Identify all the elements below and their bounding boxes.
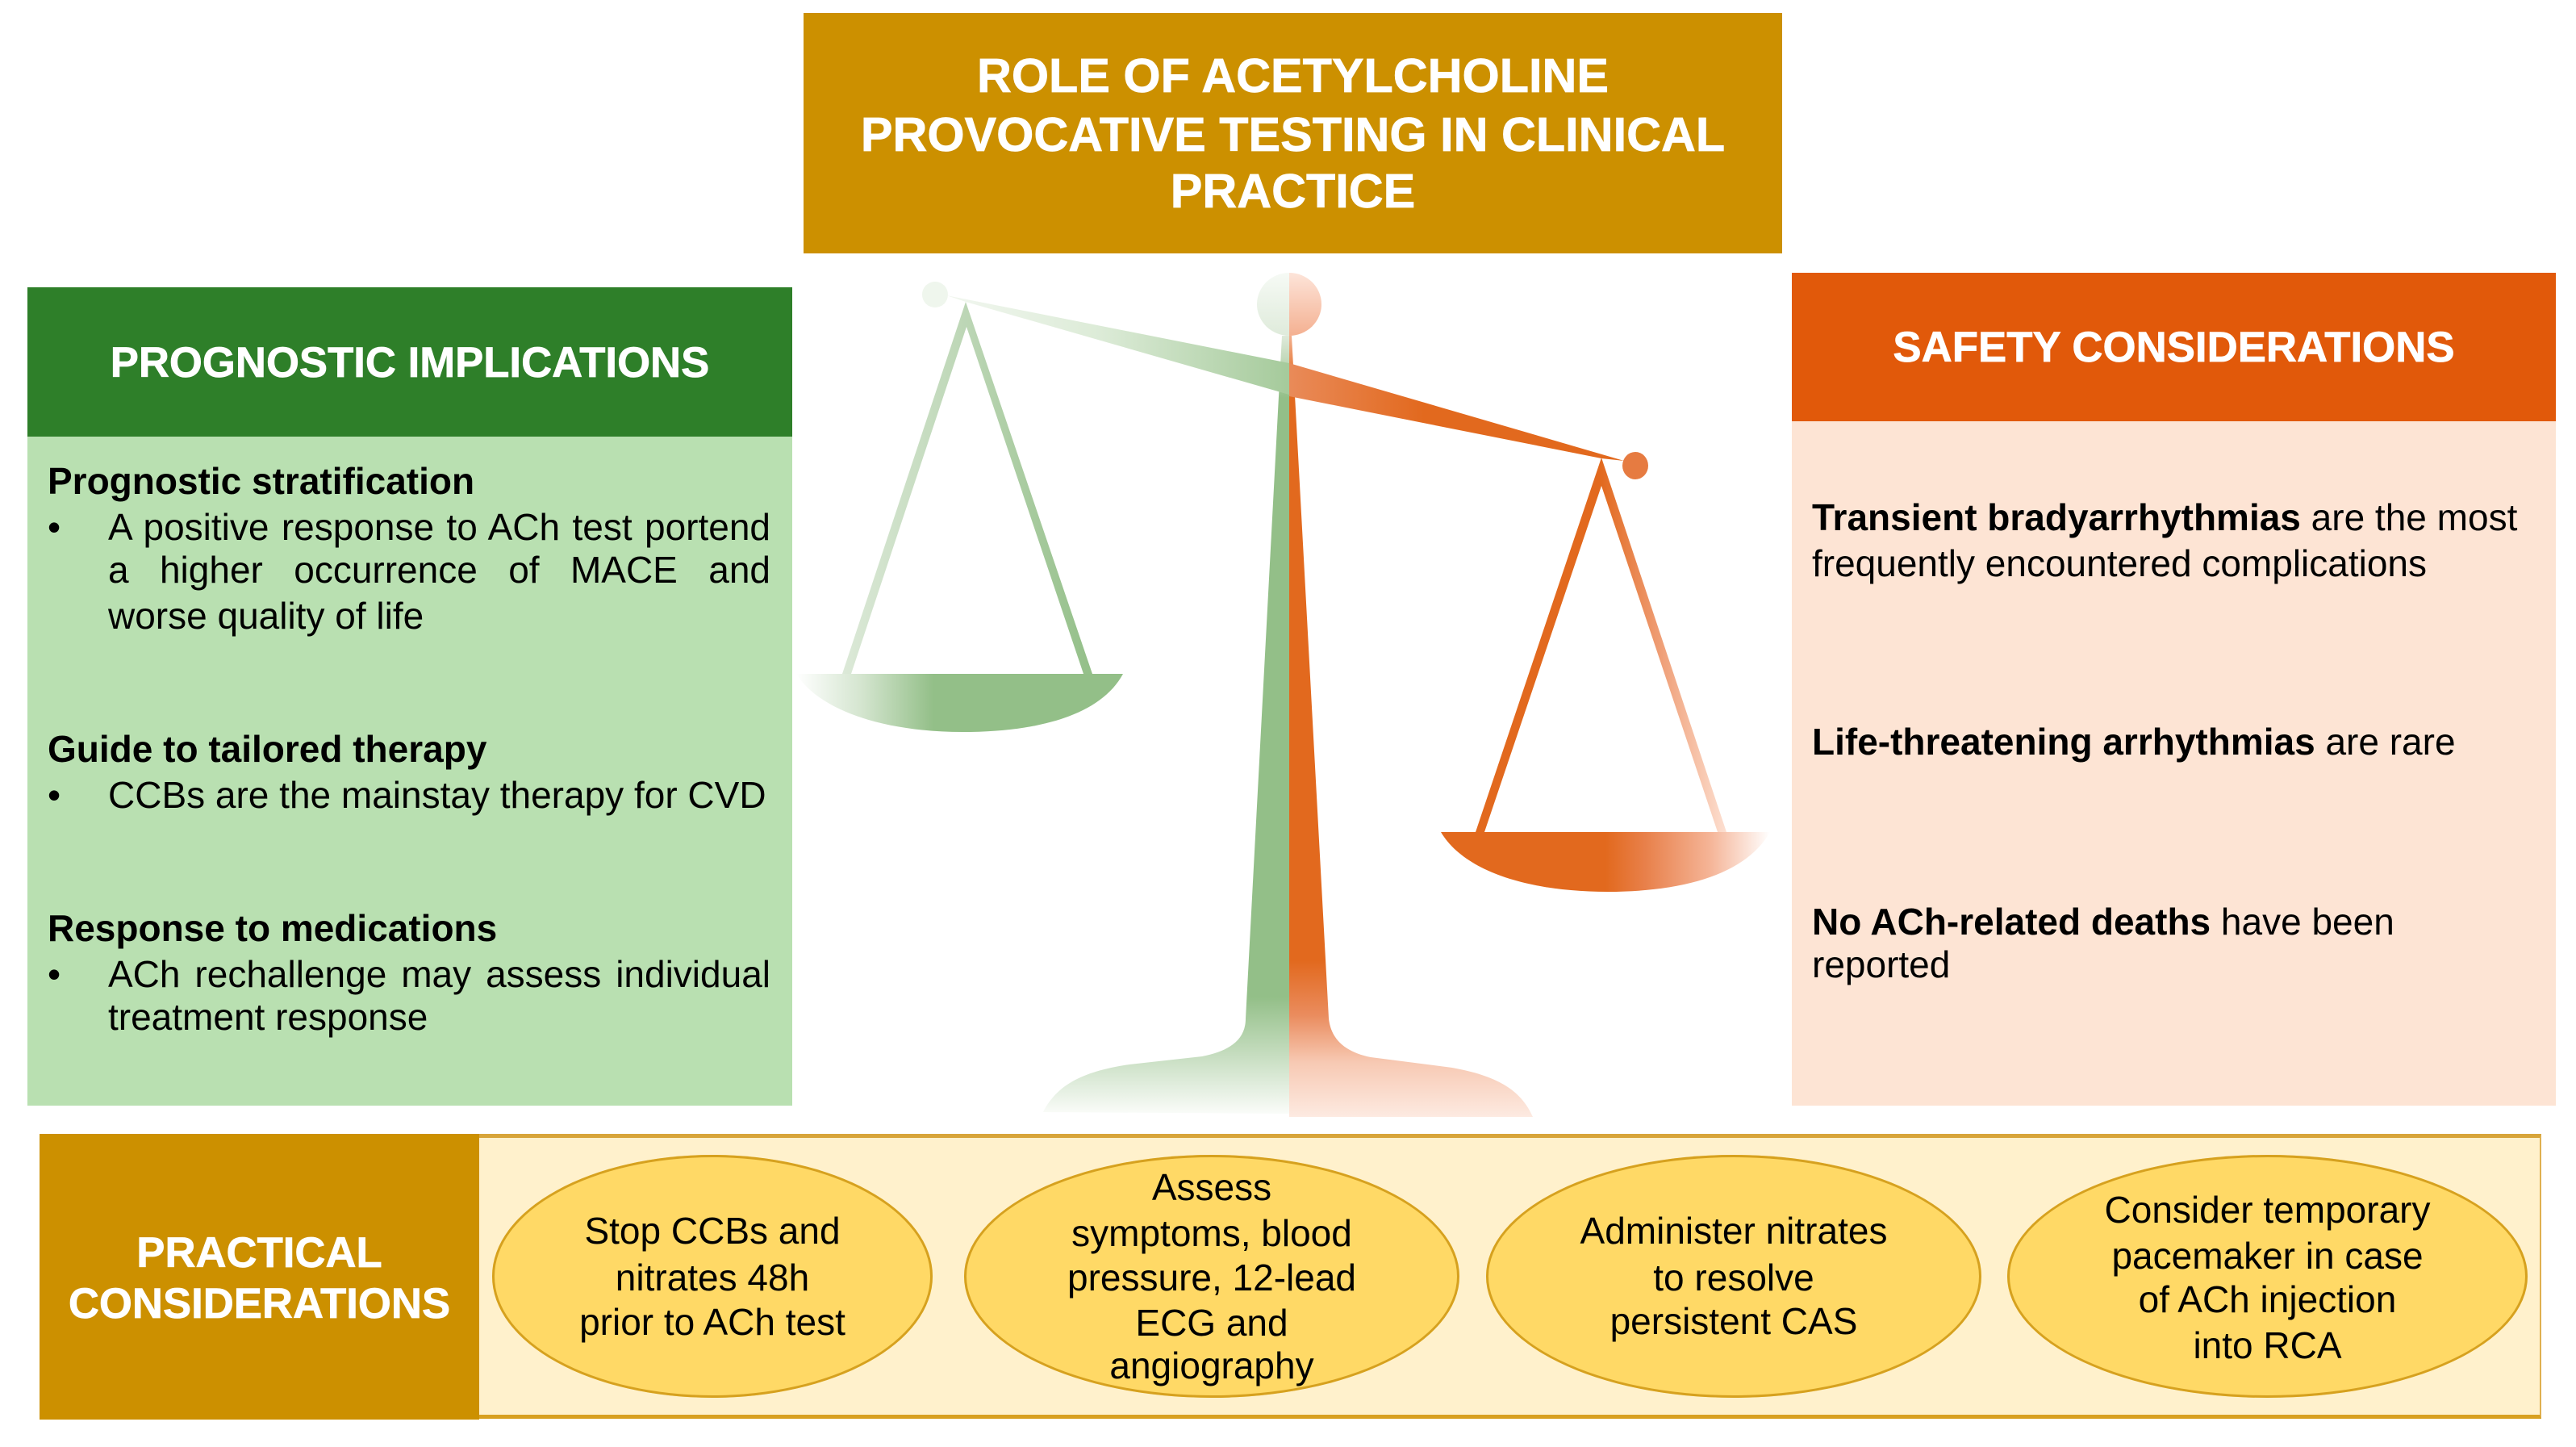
- heading: practical considerations: [40, 1134, 479, 1420]
- oval: assess symptoms: pressure, 12-lead: [1067, 1257, 1356, 1299]
- text block: guide to tailored therapy: •: [48, 774, 61, 816]
- oval: assess symptoms: angiography: [1109, 1345, 1314, 1386]
- text block: response to medications: ACh rechallenge may assess individual: [108, 953, 770, 995]
- text block: prognostic stratification: worse quality of life: [108, 595, 424, 637]
- title text: PRACTICE: [1171, 164, 1415, 218]
- text block: prognostic stratification: A positive response to ACh test portend: [108, 506, 770, 548]
- oval: administer nitrates: to resolve: [1653, 1257, 1814, 1299]
- text block: transient bradyarrhythmias: [1812, 496, 2517, 584]
- text block: no ACh-related deaths: reported: [1812, 943, 1950, 985]
- oval: assess symptoms: ECG and: [1135, 1302, 1288, 1344]
- oval: temporary pacemaker: into RCA: [2193, 1324, 2342, 1366]
- panel background: [479, 1134, 2541, 1419]
- oval: stop CCBs: prior to ACh test: [579, 1301, 845, 1343]
- text block: prognostic stratification: [48, 460, 770, 637]
- text block: no ACh-related deaths: [1812, 901, 2394, 985]
- text block: response to medications: treatment response: [108, 996, 428, 1038]
- oval: administer nitrates: persistent CAS: [1610, 1300, 1857, 1342]
- oval: stop CCBs: Stop CCBs and: [584, 1210, 841, 1252]
- text block: prognostic stratification: Prognostic stratification: [48, 460, 474, 502]
- title text: [861, 48, 1725, 218]
- oval: temporary pacemaker: Consider temporary: [2105, 1189, 2430, 1231]
- text block: life-threatening arrhythmias: Life-threatening arrhythmias are rare: [1812, 721, 2456, 763]
- text block: guide to tailored therapy: [48, 728, 766, 816]
- heading: prognostic implications: [27, 287, 792, 437]
- panel: practical considerations: [40, 1134, 2541, 1420]
- oval: assess symptoms: [964, 1155, 1459, 1398]
- left pan and strings: [796, 302, 1123, 732]
- text block: prognostic stratification: •: [48, 506, 61, 548]
- oval: temporary pacemaker: pacemaker in case: [2111, 1235, 2424, 1277]
- oval: administer nitrates: Administer nitrates: [1580, 1210, 1887, 1252]
- scale head: [1257, 273, 1321, 336]
- oval: administer nitrates: [1486, 1155, 1981, 1398]
- panel: prognostic implications: [27, 287, 792, 1106]
- title text: PROVOCATIVE TESTING IN CLINICAL: [861, 107, 1725, 161]
- text block: response to medications: [48, 907, 770, 1038]
- title text: ROLE OF ACETYLCHOLINE: [977, 48, 1609, 102]
- right beam arm: [1289, 363, 1648, 479]
- text block: guide to tailored therapy: Guide to tailored therapy: [48, 728, 486, 770]
- heading: prognostic implications: PROGNOSTIC IMPLICATIONS: [111, 339, 709, 387]
- text block: no ACh-related deaths: No ACh-related deaths have been: [1812, 901, 2394, 943]
- panel: safety considerations: [1792, 273, 2556, 1106]
- left beam arm: [922, 282, 1289, 395]
- icon: balance scale: [808, 273, 1765, 1117]
- text block: guide to tailored therapy: CCBs are the mainstay therapy for CVD: [108, 774, 766, 816]
- text block: prognostic stratification: a higher occurrence of MACE and: [108, 549, 770, 591]
- oval: stop CCBs: nitrates 48h: [616, 1257, 809, 1299]
- oval: temporary pacemaker: [2007, 1155, 2528, 1398]
- heading: safety considerations: SAFETY CONSIDERATIONS: [1893, 324, 2455, 371]
- oval: assess symptoms: Assess: [1152, 1166, 1271, 1208]
- text block: transient bradyarrhythmias: frequently encountered complications: [1812, 542, 2427, 584]
- oval: stop CCBs: [492, 1155, 933, 1398]
- text block: transient bradyarrhythmias: Transient bradyarrhythmias are the most: [1812, 496, 2517, 538]
- text block: response to medications: Response to medications: [48, 907, 497, 949]
- heading: safety considerations: [1792, 273, 2556, 421]
- title banner: [804, 13, 1782, 253]
- heading: practical considerations: PRACTICAL: [136, 1229, 382, 1277]
- oval: temporary pacemaker: of ACh injection: [2139, 1278, 2396, 1320]
- heading: practical considerations: CONSIDERATIONS: [69, 1280, 450, 1328]
- right pan and strings: [1441, 458, 1770, 892]
- oval: assess symptoms: symptoms, blood: [1071, 1212, 1352, 1254]
- text block: response to medications: •: [48, 953, 61, 995]
- scale pole and base: [1043, 336, 1533, 1117]
